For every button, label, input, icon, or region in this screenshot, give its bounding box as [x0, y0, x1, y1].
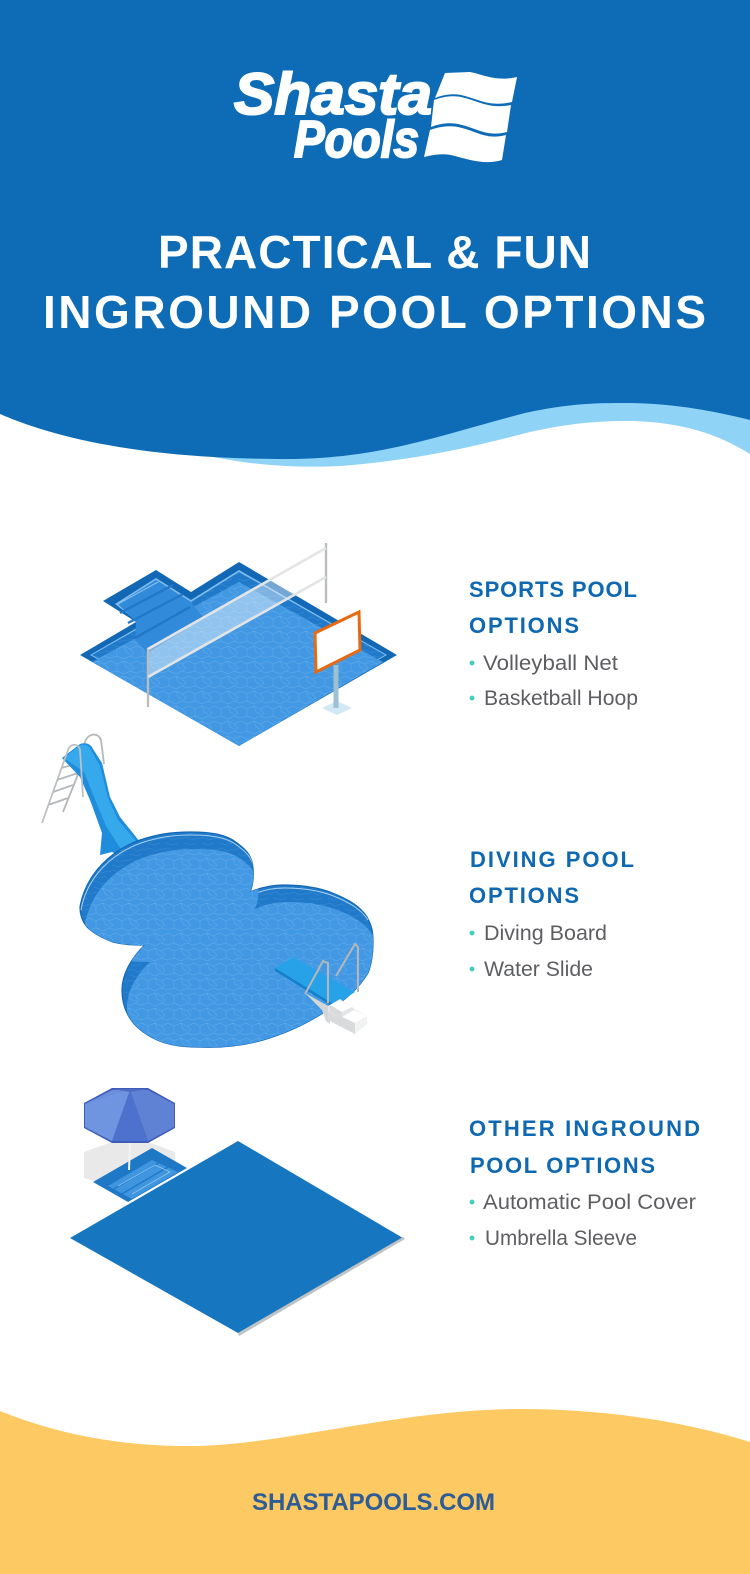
text: sports pool options: OPTIONS — [469, 613, 579, 638]
text: diving pool options: Diving Board — [484, 922, 607, 945]
title: PRACTICAL & FUN — [158, 226, 591, 278]
text: other inground pool options — [469, 1116, 700, 1250]
logo wordmark — [234, 62, 432, 169]
illustration: diving pool — [42, 735, 378, 1064]
diving board — [275, 957, 355, 1008]
text: other inground pool options: Automatic Pool Cover — [483, 1191, 696, 1214]
illustration: sports pool — [80, 543, 397, 746]
title — [43, 226, 706, 338]
text: sports pool options: SPORTS POOL — [469, 577, 637, 602]
text: other inground pool options: Umbrella Sleeve — [485, 1227, 637, 1250]
automatic pool cover — [70, 1141, 405, 1336]
water slide — [62, 743, 140, 857]
logo wordmark: Shasta — [234, 62, 432, 127]
title: INGROUND POOL OPTIONS — [43, 286, 706, 338]
logo flag waves — [424, 72, 517, 162]
logo wordmark: Pools — [294, 111, 419, 169]
pool body — [80, 832, 378, 1064]
pool body — [80, 562, 397, 746]
pool steps — [118, 580, 203, 652]
footer url: SHASTAPOOLS.COM — [252, 1489, 495, 1516]
logo: Shasta Pools — [234, 62, 517, 169]
text: diving pool options: Water Slide — [484, 958, 593, 981]
text: sports pool options — [469, 577, 638, 710]
basketball hoop — [315, 612, 360, 715]
diving board rails — [305, 944, 358, 1003]
light blue wave — [200, 395, 750, 467]
text: diving pool options: DIVING POOL — [470, 847, 634, 872]
umbrella pole — [129, 1143, 130, 1170]
text: diving pool options — [469, 847, 634, 981]
text: other inground pool options: OTHER INGROUND — [469, 1116, 700, 1141]
footer yellow wave — [0, 1409, 750, 1574]
text: sports pool options: Volleyball Net — [483, 652, 618, 675]
small pool steps — [93, 1148, 187, 1202]
slide ladder — [48, 735, 104, 812]
umbrella shadow — [84, 1142, 175, 1186]
text: other inground pool options: POOL OPTIONS — [470, 1153, 655, 1178]
diving board stairs — [305, 993, 367, 1034]
front ladder rail — [42, 745, 83, 823]
text: sports pool options: Basketball Hoop — [484, 687, 638, 710]
blue header wave — [0, 380, 750, 459]
illustration: other inground pool — [70, 1088, 405, 1336]
text: diving pool options: OPTIONS — [469, 883, 579, 908]
header background — [0, 0, 750, 400]
volleyball net — [148, 543, 327, 707]
umbrella canopy — [84, 1088, 175, 1143]
